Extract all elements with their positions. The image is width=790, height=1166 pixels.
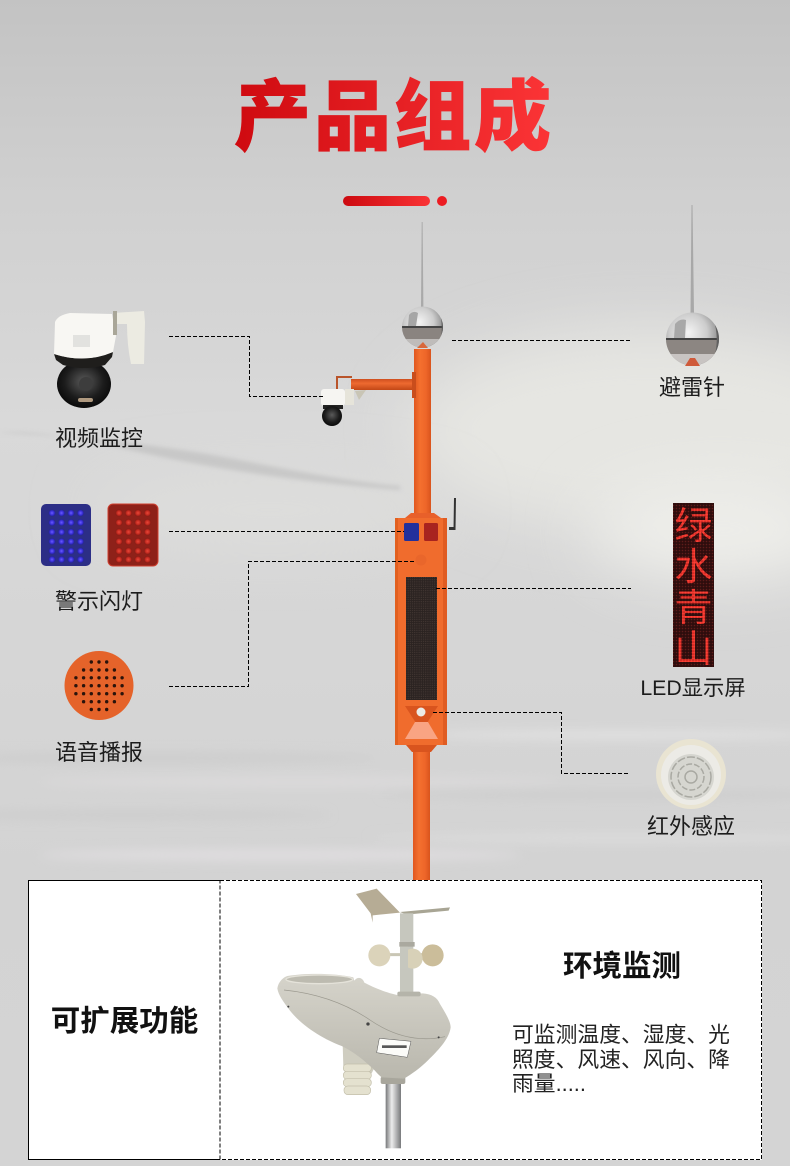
LED dot-matrix panel: 山 [674, 629, 713, 671]
LED dot-matrix panel: 青 [674, 588, 713, 630]
LED screen [406, 577, 437, 700]
speaker grille [416, 554, 426, 566]
leader line: LED screen [436, 588, 631, 590]
lower pole [413, 745, 430, 881]
item: infrared sensor [647, 739, 735, 839]
item: lightning rod: 避雷针 [659, 375, 725, 400]
item: voice broadcast: 语音播报 [55, 740, 143, 765]
icon: dome camera [54, 311, 145, 408]
lightning rod on pole [402, 222, 443, 348]
item: video surveillance [54, 311, 145, 451]
icon: blue flash panel [41, 504, 91, 566]
item: voice broadcast [55, 651, 143, 765]
icon: speaker grille [64, 651, 134, 720]
leader line: lightning rod [452, 340, 630, 342]
icon: red flash panel [108, 504, 158, 566]
item: video surveillance: 视频监控 [55, 426, 143, 451]
device enclosure [395, 513, 447, 752]
blue flash lamp [404, 523, 419, 541]
title underline decoration [343, 196, 447, 206]
LED dot-matrix panel: 水 [674, 547, 713, 589]
red flash lamp [424, 523, 438, 541]
LED dot-matrix panel: 绿 [674, 506, 713, 548]
leader line: camera [169, 336, 325, 396]
item: LED display: LED显示屏 [640, 676, 746, 700]
LED dot-matrix panel [673, 503, 714, 671]
small camera [321, 389, 366, 426]
item: warning flash lights [41, 504, 158, 614]
item: warning flash lights: 警示闪灯 [55, 589, 143, 614]
infrared sensor housing [405, 706, 438, 723]
text block: monitoring description: 可监测温度、湿度、光 [512, 1022, 730, 1047]
text block: monitoring description: 雨量..... [512, 1071, 586, 1096]
heading: environmental monitoring: 环境监测 [563, 950, 681, 983]
text block: monitoring description: 照度、风速、风向、降 [512, 1047, 730, 1072]
camera arm [337, 372, 416, 398]
upper pole [414, 349, 431, 520]
item: infrared sensor: 红外感应 [647, 814, 735, 839]
antenna [449, 498, 455, 530]
title: 产品组成 [234, 75, 554, 161]
icon: PIR sensor lens [656, 739, 726, 809]
text block: monitoring description [512, 1022, 730, 1096]
item: LED display [640, 503, 746, 700]
panel: expandable features [28, 880, 762, 1160]
leader line: voice broadcast [169, 562, 415, 686]
icon: chrome ball with needle [664, 205, 722, 366]
item: lightning rod [659, 205, 725, 400]
central pole with device [321, 222, 455, 881]
icon: weather station [277, 889, 451, 1148]
heading: expandable features: 可扩展功能 [51, 1005, 198, 1038]
leader line: infrared sensor [433, 712, 629, 774]
leader line: warning lights [169, 530, 404, 532]
